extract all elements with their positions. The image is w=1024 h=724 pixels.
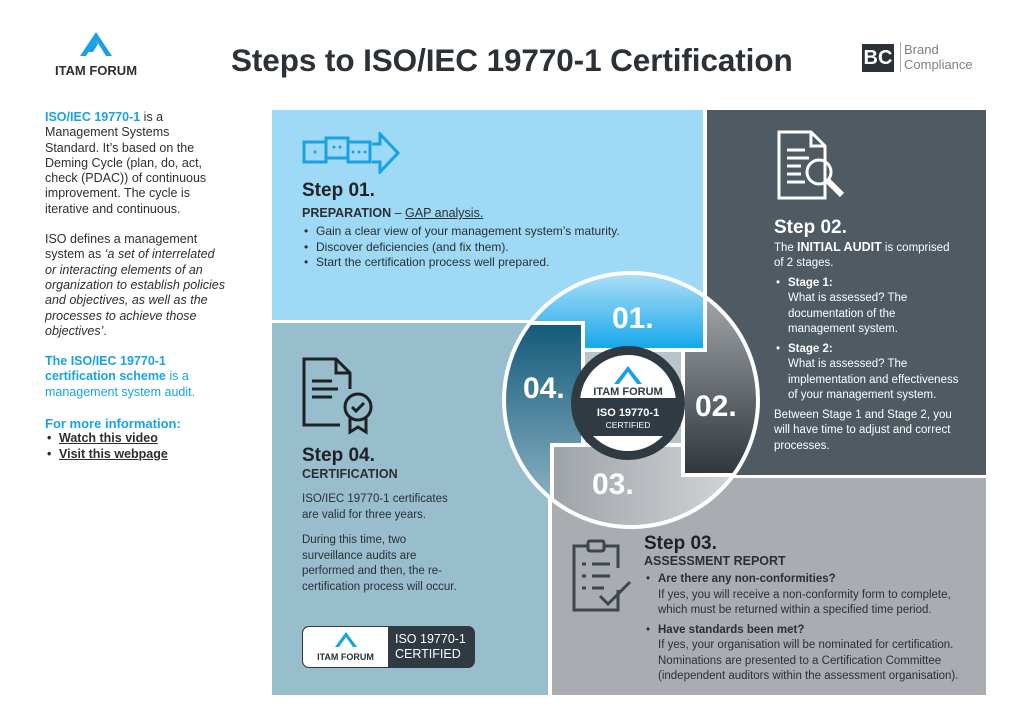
- step 01 text: Start the certification process well prepared.: [316, 255, 549, 269]
- certified badge: CERTIFIED: [395, 647, 461, 661]
- step 03 text: ASSESSMENT REPORT: [644, 554, 786, 568]
- panel: step 02: [707, 110, 986, 475]
- left intro text: [44, 110, 225, 461]
- step 03 text: If yes, your organisation will be nominated for certification. Nominations are presented to a Certification Committee (independent auditors within the assessment organisation).: [658, 639, 958, 682]
- cycle diagram: 02.: [695, 390, 737, 423]
- cycle diagram: [502, 271, 760, 529]
- step 02 text: The INITIAL AUDIT is comprised of 2 stages.: [774, 240, 949, 269]
- logo: brand compliance: Brand: [904, 42, 939, 57]
- step 01 text: Gain a clear view of your management system’s maturity.: [316, 224, 620, 238]
- step 02 text: What is assessed? The documentation of the management system.: [788, 292, 907, 335]
- icon: document magnifier: [778, 130, 844, 200]
- cycle diagram: ISO 19770-1: [597, 407, 659, 419]
- certified badge: ITAM FORUM: [317, 652, 374, 662]
- logo: brand compliance: BC: [864, 47, 892, 69]
- icon: clipboard: [572, 540, 631, 612]
- logo: ITAM forum: ITAM FORUM: [55, 63, 137, 78]
- step 03 text: Are there any non-conformities?: [658, 573, 836, 585]
- left intro text: For more information:: [45, 416, 181, 431]
- left intro text: Visit this webpage: [59, 447, 168, 461]
- certified badge: [302, 626, 475, 668]
- step 02 text: [774, 217, 958, 452]
- step 02 text: Between Stage 1 and Stage 2, you will have time to adjust and correct processes.: [774, 408, 952, 452]
- step 02 text: Step 02.: [774, 217, 847, 238]
- left intro text: ISO/IEC 19770-1 is a Management Systems Standard. It’s based on the Deming Cycle (plan, do, act, check (PDAC)) of continuous improvement. The cycle is iterative and continuous.: [45, 110, 206, 216]
- cycle diagram: 01.: [612, 302, 654, 335]
- step 03 text: Step 03.: [644, 533, 717, 554]
- step 04 text: CERTIFICATION: [302, 466, 398, 480]
- step 04 text: [302, 445, 457, 592]
- step 02 text: Stage 1:: [788, 276, 833, 288]
- step 02 text: What is assessed? The implementation and effectiveness of your management system.: [788, 358, 958, 401]
- step 01 text: PREPARATION – GAP analysis.: [302, 206, 483, 220]
- left intro text: Watch this video: [59, 431, 158, 445]
- cycle diagram: 04.: [523, 372, 565, 405]
- step 01 text: Discover deficiencies (and fix them).: [316, 240, 509, 254]
- logo: ITAM forum: [55, 32, 137, 78]
- title: Steps to ISO/IEC 19770-1 Certification: [231, 42, 793, 78]
- certified badge: ISO 19770-1: [395, 632, 466, 646]
- left intro text: ISO defines a management system as ‘a set of interrelated or interacting elements of an organization to establish policies and objectives, as well as the processes to achieve those objectives’.: [45, 232, 225, 338]
- left intro text: The ISO/IEC 19770-1 certification scheme is a management system audit.: [45, 354, 195, 399]
- cycle diagram: CERTIFIED: [606, 420, 650, 430]
- icon: arrow blocks: [302, 132, 400, 174]
- step 01 text: Step 01.: [302, 180, 375, 201]
- step 02 text: Stage 2:: [788, 342, 833, 354]
- step 04 text: Step 04.: [302, 445, 375, 466]
- panel: step 03: [552, 478, 986, 695]
- step 03 text: [644, 533, 958, 682]
- step 04 text: During this time, two surveillance audits are performed and then, the re-certification process will occur.: [302, 534, 457, 592]
- cycle diagram: 03.: [592, 468, 634, 501]
- step 03 text: If yes, you will receive a non-conformity form to complete, which must be returned within a specified time period.: [658, 588, 951, 616]
- step 01 text: [302, 180, 620, 269]
- panel: step 01: [272, 110, 703, 320]
- logo: brand compliance: [862, 42, 973, 72]
- logo: brand compliance: Compliance: [904, 57, 973, 72]
- panel: step 04: [272, 323, 548, 695]
- icon: certificate: [302, 358, 372, 435]
- cycle diagram: ITAM FORUM: [593, 386, 663, 398]
- step 03 text: Have standards been met?: [658, 624, 804, 636]
- step 04 text: ISO/IEC 19770-1 certificates are valid for three years.: [302, 493, 448, 520]
